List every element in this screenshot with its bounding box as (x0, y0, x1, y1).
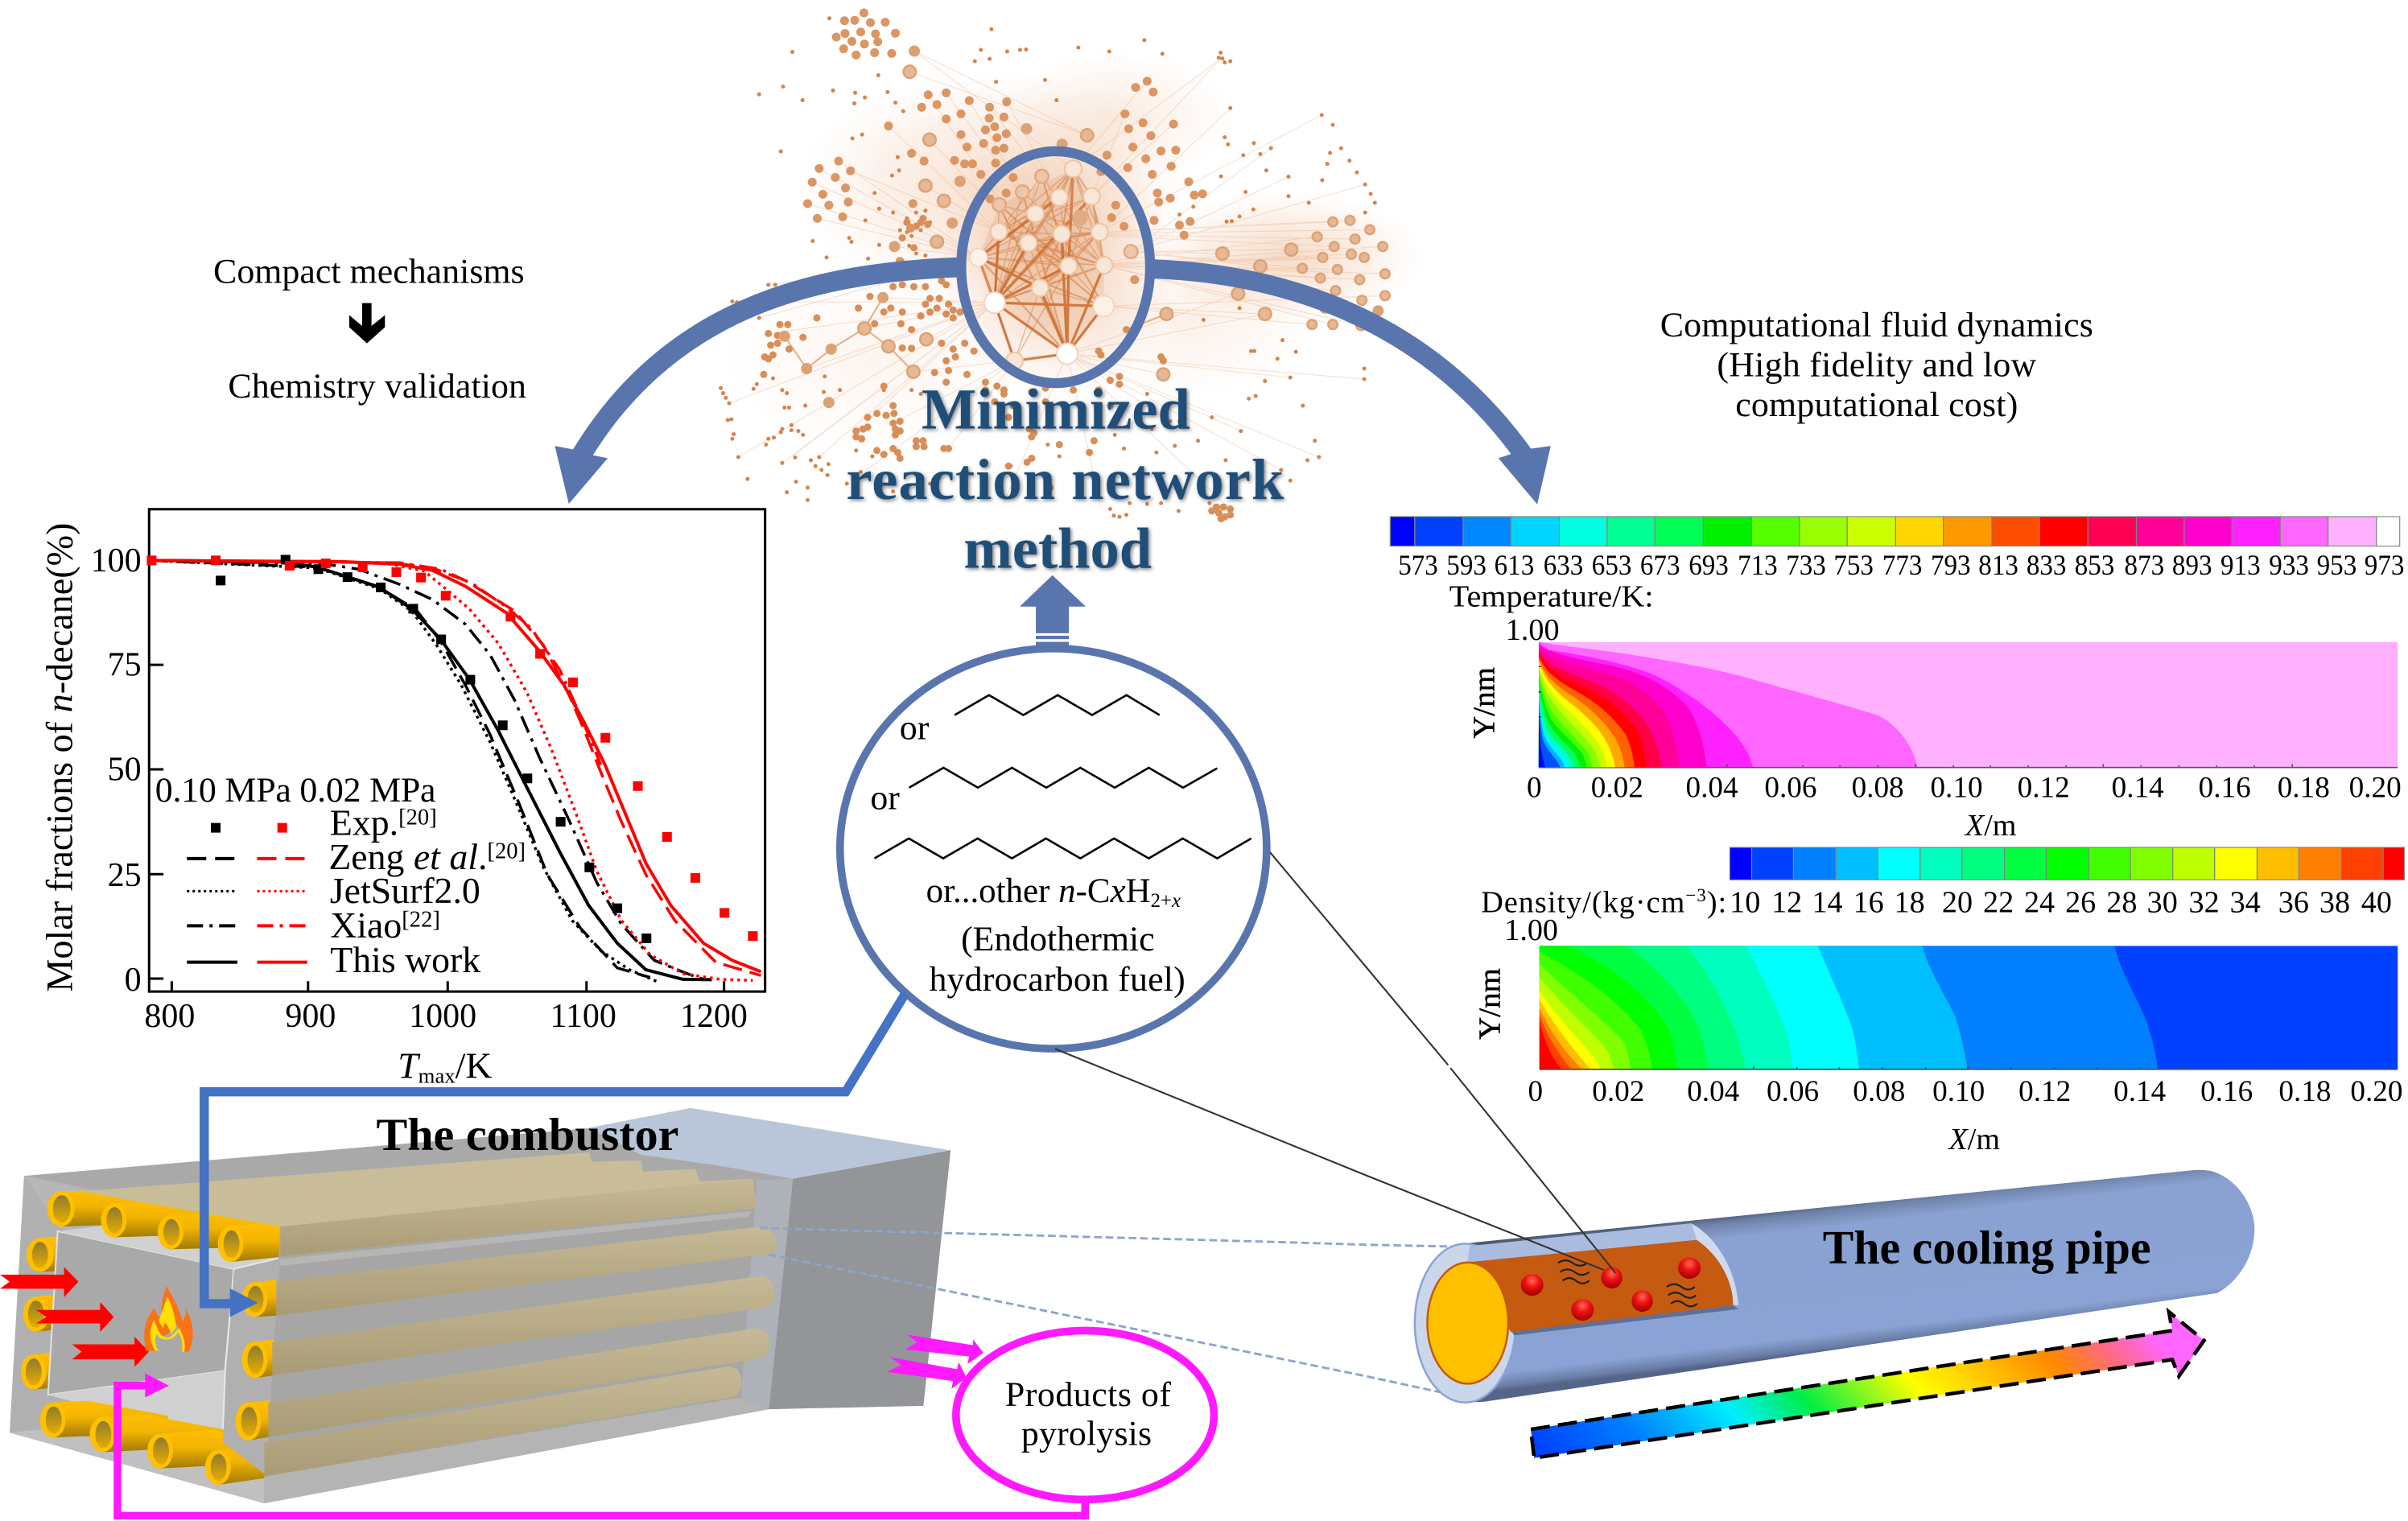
x axis title: /K (456, 1045, 492, 1086)
icon: red air arrows (0, 1267, 149, 1367)
x axis title density plot: X/m (1947, 1123, 2000, 1156)
fuel labels: or (870, 779, 900, 818)
temperature scale values: 673 (1640, 549, 1680, 581)
x axis tick labels: 800 (144, 998, 195, 1035)
arrows: products flowing to pyrolysis ellipse (888, 1335, 983, 1389)
heat wave marks (1558, 1260, 1697, 1306)
pipe opening rim (1415, 1243, 1515, 1403)
panel: products of pyrolysis (956, 1330, 1214, 1499)
legend text: [20] (487, 839, 526, 864)
temperature scale values: 873 (2125, 549, 2164, 581)
icon: flame (144, 1286, 193, 1352)
temperature scale values: 813 (1978, 549, 2018, 581)
arrow: rainbow temperature arrow (1531, 1312, 2204, 1458)
combustor back wall and hood (24, 1108, 950, 1409)
fuel labels: hydrocarbon fuel) (929, 960, 1185, 999)
molecule chains (875, 695, 1251, 859)
x axis tick labels: 1200 (680, 998, 748, 1035)
text: density scale and label: 38 (2319, 885, 2350, 919)
network nodes: larger solid dots (807, 13, 1202, 280)
y axis tick labels: 25 (108, 857, 142, 894)
temperature contour field: outer bands (1539, 642, 2398, 768)
chart: density contour (1473, 913, 2402, 1156)
text: computational fluid dynamics: Computational fluid dynamics (1660, 306, 2093, 344)
x axis title temperature plot: X/m (1964, 809, 2017, 843)
chart: density contour: 1.00 (1504, 913, 1558, 947)
x tick labels density plot: 0.02 (1592, 1075, 1644, 1108)
x tick labels temperature plot: 0.12 (2018, 771, 2070, 804)
x tick labels temperature plot: 0.16 (2199, 771, 2251, 804)
text: density scale and label: −3 (1685, 885, 1707, 905)
x tick labels density plot: 0.18 (2278, 1075, 2332, 1108)
arrow: magenta recycle line (118, 1374, 1085, 1515)
legend text (155, 771, 526, 980)
x tick labels density plot: 0.12 (2018, 1075, 2071, 1108)
text: compact mechanisms: Compact mechanisms (213, 253, 525, 291)
bottom row tube stubs (40, 1401, 276, 1485)
temperature scale values: 713 (1738, 549, 1778, 581)
icon: black down arrow (349, 303, 385, 344)
text: density scale and label: 16 (1853, 885, 1884, 919)
hot fuel interior (1468, 1240, 1733, 1332)
panel: density colour bar (1730, 847, 2404, 880)
top row tube stubs (47, 1190, 282, 1262)
temperature scale values: 953 (2317, 549, 2356, 581)
temperature scale values: 613 (1495, 549, 1534, 581)
temperature scale values: 793 (1931, 549, 1971, 581)
x tick labels temperature plot: 0.18 (2278, 771, 2330, 804)
panel: products of pyrolysis: Products of (1005, 1375, 1171, 1414)
temperature scale values: 573 (1398, 549, 1438, 581)
temperature scale values: 833 (2027, 549, 2066, 581)
x tick labels temperature plot: 0.06 (1764, 771, 1816, 804)
network hubs inside the oval (979, 169, 1131, 361)
chart: temperature contour: 1.00 (1506, 613, 1560, 647)
fuel labels: (Endothermic (961, 920, 1155, 958)
x tick labels temperature plot: 0.14 (2112, 771, 2164, 804)
right column tube stubs (236, 1280, 276, 1441)
panel: products of pyrolysis: pyrolysis (1021, 1415, 1152, 1453)
fuel labels: 2+x (1151, 890, 1181, 912)
x axis title: max (419, 1063, 456, 1087)
x tick labels density plot: 0.20 (2350, 1075, 2402, 1108)
y axis tick labels: 75 (108, 647, 142, 684)
x tick labels temperature plot: 0.10 (1930, 771, 1983, 804)
temperature scale values: 593 (1446, 549, 1486, 581)
legend text: Exp. (330, 802, 398, 843)
x tick labels density plot: 0 (1528, 1075, 1543, 1108)
network diagram: reaction network (721, 13, 1425, 519)
text: density scale and label: 12 (1771, 885, 1802, 919)
density contour field (1540, 946, 2398, 1070)
text: density scale and label: 26 (2065, 885, 2096, 919)
text: density scale and label: 34 (2230, 885, 2261, 919)
x tick labels density plot (1528, 1075, 2402, 1108)
x tick labels density plot: 0.04 (1687, 1075, 1740, 1108)
fuel labels: or...other n-CxH (926, 872, 1151, 910)
arrow: blue fuel feed line into the combustor (204, 994, 905, 1317)
temperature scale values: 853 (2075, 549, 2114, 581)
title: Minimized (922, 376, 1190, 441)
plot curves, markers and legend keys (149, 559, 761, 991)
label: the combustor: The combustor (377, 1110, 678, 1160)
y axis title density plot: Y/nm (1473, 968, 1507, 1040)
fuel labels: or (900, 709, 930, 748)
network hubs: centres (864, 72, 1385, 374)
text: density scale and label: ): (1707, 885, 1727, 919)
label: the cooling pipe: The cooling pipe (1823, 1221, 2151, 1274)
legend text: This work (330, 939, 480, 980)
x tick labels temperature plot: 0.08 (1852, 771, 1904, 804)
arrow: up arrow from fuel circle to the method title (1020, 575, 1086, 649)
temperature scale values: 973 (2365, 549, 2404, 581)
text: density scale and label: 30 (2147, 885, 2178, 919)
arrow: left curved arrow to chemistry validation (555, 267, 962, 504)
arrow: right curved arrow to computational fluid dynamics (1148, 269, 1551, 505)
oval: core of the network (961, 151, 1150, 383)
text: density scale and label: 18 (1895, 885, 1925, 919)
network hubs: rims (785, 51, 1385, 402)
x axis tick labels (144, 998, 748, 1035)
x tick labels density plot: 0.06 (1767, 1075, 1819, 1108)
temperature scale values: 733 (1786, 549, 1826, 581)
text: density scale and label: 32 (2189, 885, 2220, 919)
pipe body (1465, 1170, 2254, 1403)
combustor left frame (10, 1176, 280, 1503)
y axis title: Molar fractions of n-decane(%) (39, 523, 80, 992)
text: density scale and label: 24 (2024, 885, 2055, 919)
text: computational fluid dynamics: (High fidelity and low (1717, 346, 2037, 385)
network nodes: medium dots (764, 218, 1231, 519)
x tick labels temperature plot: 0.04 (1685, 771, 1738, 804)
temperature contour field: inner bands (1539, 645, 1706, 767)
panel: the cooling pipe (1415, 1170, 2254, 1458)
text: computational fluid dynamics (1660, 306, 2093, 424)
y axis tick labels: 50 (108, 751, 142, 788)
x tick labels temperature plot: 0.02 (1591, 771, 1643, 804)
text: density scale and label: 10 (1730, 885, 1760, 919)
panel: the combustor (0, 1108, 950, 1503)
legend text: JetSurf2.0 (330, 870, 480, 911)
x tick labels temperature plot: 0 (1527, 771, 1542, 804)
text: chemistry validation: Chemistry validation (228, 367, 526, 406)
chart: molar fraction of n-decane vs Tmax (39, 509, 765, 1087)
y axis tick labels: 0 (125, 962, 142, 999)
plot frame (149, 509, 765, 991)
panel: endothermic hydrocarbon fuel circle (840, 649, 1267, 1049)
y axis tick labels: 100 (91, 542, 142, 579)
x tick labels density plot: 0.14 (2113, 1075, 2167, 1108)
panel: temperature colour bar (1390, 517, 2404, 581)
text: density scale and label: 22 (1983, 885, 2014, 919)
text: density scale and label (1481, 885, 2392, 919)
temperature scale values: 633 (1544, 549, 1583, 581)
fuel labels (870, 709, 1185, 999)
legend text: Zeng et al. (328, 836, 487, 877)
combustor side wall (223, 1179, 793, 1503)
cut-away wall (1468, 1223, 1738, 1335)
text: computational fluid dynamics: computational cost) (1735, 385, 2018, 424)
legend text: [20] (398, 804, 437, 830)
x axis tick labels: 1000 (409, 998, 476, 1035)
beige tube bodies (80, 1152, 777, 1477)
legend text: [22] (402, 907, 440, 933)
temperature scale values: 913 (2220, 549, 2261, 581)
temperature scale values: 653 (1592, 549, 1631, 581)
yellow fuel cross-section (1428, 1263, 1508, 1383)
x tick labels density plot: 0.08 (1853, 1075, 1905, 1108)
title: reaction network (846, 447, 1284, 512)
text: density scale and label: 20 (1942, 885, 1973, 919)
network nodes: small dots (721, 19, 1375, 517)
text: density scale and label: 28 (2106, 885, 2137, 919)
x tick labels temperature plot (1527, 771, 2402, 804)
combustion chamber window (48, 1225, 280, 1442)
temperature scale values: 933 (2269, 549, 2309, 581)
temperature scale values: 693 (1688, 549, 1729, 581)
text: density scale and label: 14 (1812, 885, 1843, 919)
text: density scale and label: Density/(kg·cm (1481, 885, 1685, 919)
title (846, 376, 1284, 580)
dashed lines from combustor tube to cooling pipe (761, 1228, 1469, 1396)
x tick labels temperature plot: 0.20 (2349, 771, 2402, 804)
text: density scale and label: 36 (2278, 885, 2309, 919)
red reactive particles (1521, 1257, 1701, 1321)
y axis title temperature plot: Y/nm (1468, 667, 1502, 739)
legend text: 0.10 MPa 0.02 MPa (155, 771, 436, 810)
x tick labels density plot: 0.16 (2200, 1075, 2253, 1108)
left column tube stubs (21, 1235, 72, 1390)
text: density scale and label: 40 (2361, 885, 2392, 919)
x axis tick labels: 1100 (550, 998, 616, 1035)
y axis tick labels (91, 542, 142, 999)
chart: temperature contour (1468, 613, 2402, 843)
x tick labels density plot: 0.10 (1932, 1075, 1985, 1108)
temperature scale values: 753 (1833, 549, 1874, 581)
text: temperature label: Temperature/K: (1449, 579, 1654, 613)
leader lines from fuel circle to pipe particle (1055, 852, 1615, 1273)
temperature scale values (1398, 549, 2404, 581)
x axis tick labels: 900 (285, 998, 336, 1035)
temperature scale values: 893 (2172, 549, 2212, 581)
x axis title: T (398, 1045, 421, 1086)
title: method (963, 515, 1152, 580)
temperature scale values: 773 (1882, 549, 1922, 581)
legend text: Xiao (330, 905, 402, 946)
